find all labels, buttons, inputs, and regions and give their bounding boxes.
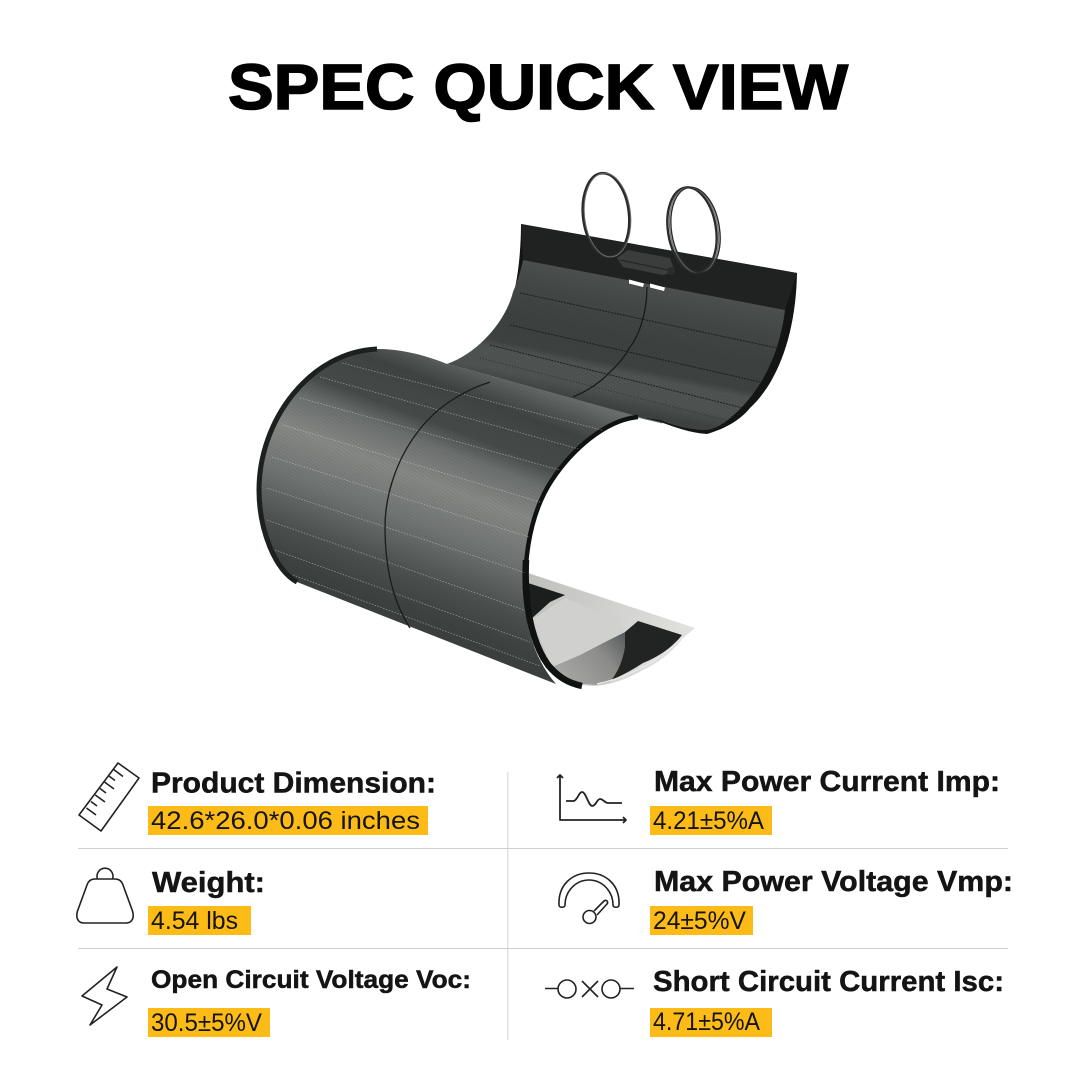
value highlight: 42.6*26.0*0.06 inches <box>151 807 420 835</box>
spec: open circuit voltage <box>82 966 471 1037</box>
back sheet <box>447 224 797 434</box>
icon: lightning bolt <box>82 967 127 1025</box>
product image: flexible solar panel <box>259 171 797 686</box>
icon: weight <box>77 868 133 923</box>
heading: Max Power Voltage Vmp: <box>654 866 1013 898</box>
value highlight: 4.54 lbs <box>151 907 238 935</box>
row divider 2 <box>78 948 1008 949</box>
mounting rings <box>579 171 726 276</box>
spec: product dimension <box>79 763 436 835</box>
value highlight: 4.71±5%A <box>653 1008 760 1036</box>
spec: short circuit current <box>545 966 1004 1037</box>
value highlight: 4.21±5%A <box>653 807 764 835</box>
junction box <box>617 250 675 291</box>
heading: Open Circuit Voltage Voc: <box>151 966 471 994</box>
heading: Product Dimension: <box>151 768 436 800</box>
spec: weight <box>77 867 265 935</box>
icon: gauge <box>559 873 619 924</box>
row divider 1 <box>78 848 1008 849</box>
icon: line chart <box>557 775 626 823</box>
front roll <box>259 349 640 686</box>
underside of sheet <box>526 573 695 686</box>
heading: Weight: <box>152 867 265 899</box>
heading: Max Power Current Imp: <box>654 766 1000 798</box>
value highlight: 24±5%V <box>653 907 746 935</box>
vertical divider <box>507 772 508 1040</box>
title: SPEC QUICK VIEW <box>228 51 849 123</box>
heading: Short Circuit Current Isc: <box>653 966 1004 998</box>
spec: max power voltage <box>559 866 1013 935</box>
icon: ruler <box>79 763 139 831</box>
value highlight: 30.5±5%V <box>151 1009 262 1037</box>
icon: open circuit symbol <box>545 980 634 998</box>
spec: max power current <box>557 766 1000 835</box>
